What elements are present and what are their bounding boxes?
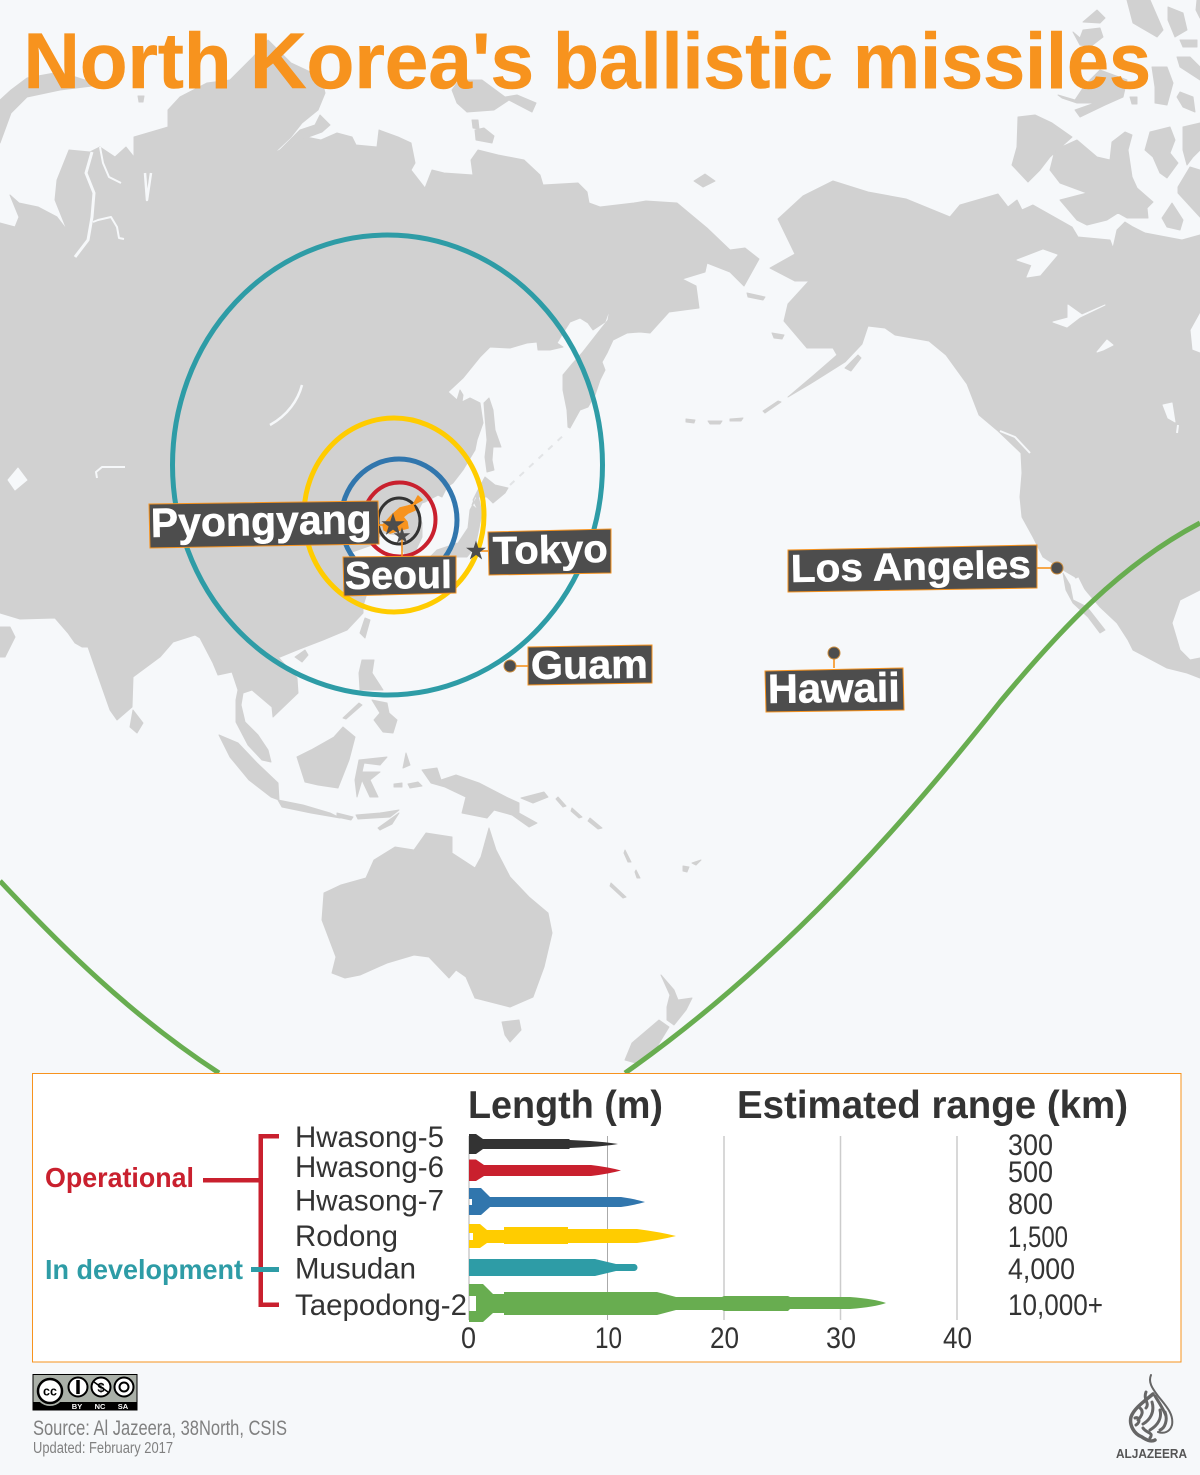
logo: Al Jazeera — [1116, 1375, 1188, 1461]
range line: Taepodong-2 east — [625, 523, 1200, 1073]
range values: 1,500 — [1008, 1221, 1068, 1254]
missile: Musudan — [469, 1259, 638, 1276]
icon: Creative Commons badge — [33, 1374, 137, 1411]
wordmark: ALJAZEERA — [1116, 1446, 1188, 1461]
title: missiles — [853, 16, 1151, 105]
leader lines — [378, 525, 1052, 668]
missile names: Hwasong-7 — [295, 1184, 444, 1218]
missile: Rodong — [469, 1224, 676, 1248]
missile: Hwasong-5 — [469, 1134, 618, 1154]
heading: estimated range: Estimated range (km) — [737, 1084, 1128, 1127]
icon: calligraphic flame — [1131, 1375, 1172, 1441]
range values — [1008, 1129, 1103, 1322]
bracket — [203, 1134, 279, 1307]
status label: In development: In development — [45, 1254, 243, 1285]
missile names: Musudan — [295, 1252, 416, 1286]
icon: Creative Commons badge: cc — [43, 1384, 57, 1398]
status label: Operational: Operational — [45, 1162, 194, 1193]
icon: Creative Commons badge: NC — [95, 1402, 106, 1411]
North Korea highlight — [383, 496, 422, 533]
range ring: Hwasong-6 — [364, 482, 436, 556]
marker: Los Angeles dot — [1051, 562, 1063, 574]
label: Los Angeles: Los Angeles — [790, 544, 1031, 591]
icon: Creative Commons badge: BY — [72, 1402, 82, 1411]
marker: Pyongyang star — [383, 514, 403, 533]
missile names: Hwasong-6 — [295, 1151, 444, 1184]
land: Baja California — [1063, 573, 1105, 633]
label: Guam: Guam — [531, 643, 648, 688]
missile names: Hwasong-5 — [295, 1121, 444, 1154]
range ring: Rodong — [304, 418, 484, 612]
land: Sakhalin, Hokkaido, Honshu — [430, 398, 508, 557]
source note: Source: Al Jazeera, 38North, CSIS — [33, 1417, 287, 1440]
axis labels: 0 — [461, 1322, 476, 1355]
label: Seoul: Seoul — [345, 554, 452, 598]
land: Wrangel, Alaskan and Aleutian islands — [686, 174, 861, 424]
marker: Tokyo star — [467, 542, 485, 558]
update note: Updated: February 2017 — [33, 1440, 173, 1457]
axis labels: 10 — [595, 1322, 622, 1355]
land: Eurasia — [0, 40, 759, 762]
label: Tokyo: Tokyo — [492, 528, 608, 573]
land: Novaya Zemlya and Arctic Russia islands — [0, 72, 536, 150]
title: North — [24, 16, 232, 105]
marker: Hawaii dot — [828, 647, 840, 659]
missile: Taepodong-2 — [469, 1284, 886, 1322]
land: Philippines and Indonesia — [219, 660, 422, 830]
marker: Guam dot — [504, 660, 516, 672]
marker: Seoul star — [395, 528, 409, 542]
missile: Hwasong-6 — [469, 1160, 621, 1181]
land: Arabia edge, Sri Lanka, Taiwan, Hainan — [0, 618, 370, 733]
axis labels: 30 — [826, 1322, 856, 1355]
label: Hawaii: Hawaii — [768, 664, 900, 712]
range values: 800 — [1008, 1188, 1053, 1221]
missile names: Taepodong-2 — [295, 1289, 467, 1322]
world map — [0, 0, 1200, 1063]
title: Korea's — [250, 16, 534, 105]
land: New Guinea and Pacific islands — [422, 768, 701, 898]
land: Australia, Tasmania, New Zealand — [322, 828, 692, 1063]
axis labels — [461, 1322, 972, 1355]
range values: 300 — [1008, 1129, 1053, 1162]
missile names — [295, 1121, 467, 1322]
heading: length: Length (m) — [468, 1084, 663, 1127]
range line: Taepodong-2 west — [0, 881, 219, 1073]
range ring: Hwasong-7 — [341, 459, 457, 581]
panel: missile comparison — [32, 1074, 1181, 1362]
range ring: Musudan — [172, 235, 602, 695]
title — [24, 16, 1151, 105]
inlets and lakes — [8, 147, 1178, 600]
missile names: Rodong — [295, 1220, 398, 1253]
icon: Creative Commons badge: SA — [118, 1402, 129, 1411]
axis labels: 20 — [710, 1322, 739, 1355]
title: ballistic — [553, 16, 833, 105]
label: Pyongyang: Pyongyang — [150, 496, 372, 546]
range values: 4,000 — [1008, 1253, 1075, 1286]
range ring: Hwasong-5 — [378, 498, 420, 544]
grid lines — [469, 1136, 957, 1320]
icon: Creative Commons badge: $ — [97, 1380, 105, 1395]
axis labels: 40 — [943, 1322, 972, 1355]
land: Kuril islands — [510, 433, 566, 485]
range values: 10,000+ — [1008, 1289, 1103, 1322]
land: Canadian Arctic islands — [1012, 0, 1200, 230]
missile: Hwasong-7 — [469, 1188, 645, 1215]
range values: 500 — [1008, 1156, 1053, 1189]
land: North America — [770, 181, 1200, 678]
